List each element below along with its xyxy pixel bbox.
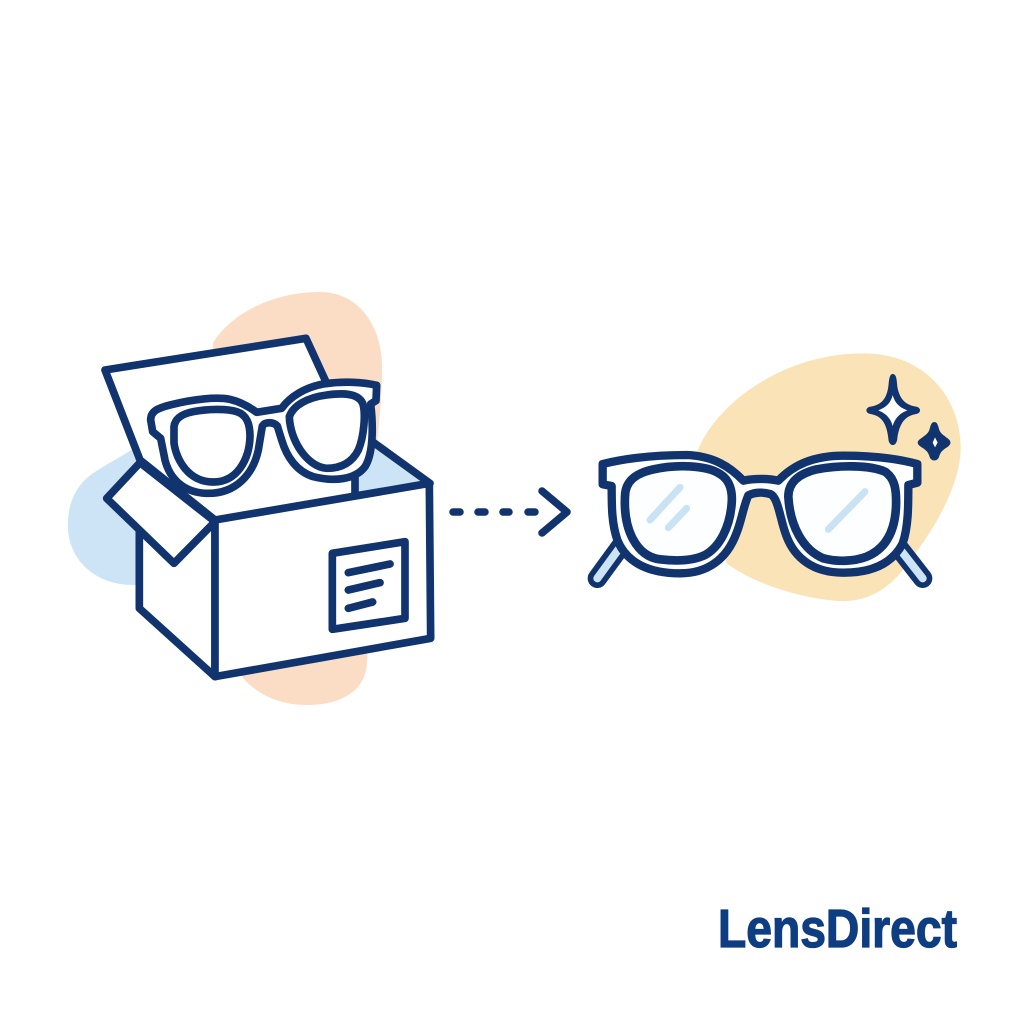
background blob: blue xyxy=(68,440,200,585)
lens highlights xyxy=(650,487,865,529)
background blob: yellow xyxy=(697,353,961,601)
clean glasses xyxy=(597,374,950,578)
back right edge and inner post xyxy=(355,442,430,497)
box interior back right xyxy=(355,443,428,497)
big back flap outline xyxy=(105,338,327,520)
open box with glasses xyxy=(105,338,431,677)
glasses in box xyxy=(151,382,377,493)
background blob: peach xyxy=(213,292,382,705)
left lens xyxy=(625,466,732,560)
shipping label xyxy=(332,542,405,629)
left small flap xyxy=(107,463,215,563)
left side panel xyxy=(139,520,215,677)
front face xyxy=(215,483,431,677)
frame xyxy=(603,455,917,573)
large sparkle xyxy=(866,374,920,445)
small sparkle xyxy=(918,422,950,460)
logo: LensDirect: LensDirect xyxy=(718,899,957,959)
right temple xyxy=(897,545,923,578)
left temple xyxy=(597,545,622,578)
big back flap fill xyxy=(105,338,355,520)
dashed arrow xyxy=(453,491,567,533)
right lens xyxy=(788,466,896,561)
